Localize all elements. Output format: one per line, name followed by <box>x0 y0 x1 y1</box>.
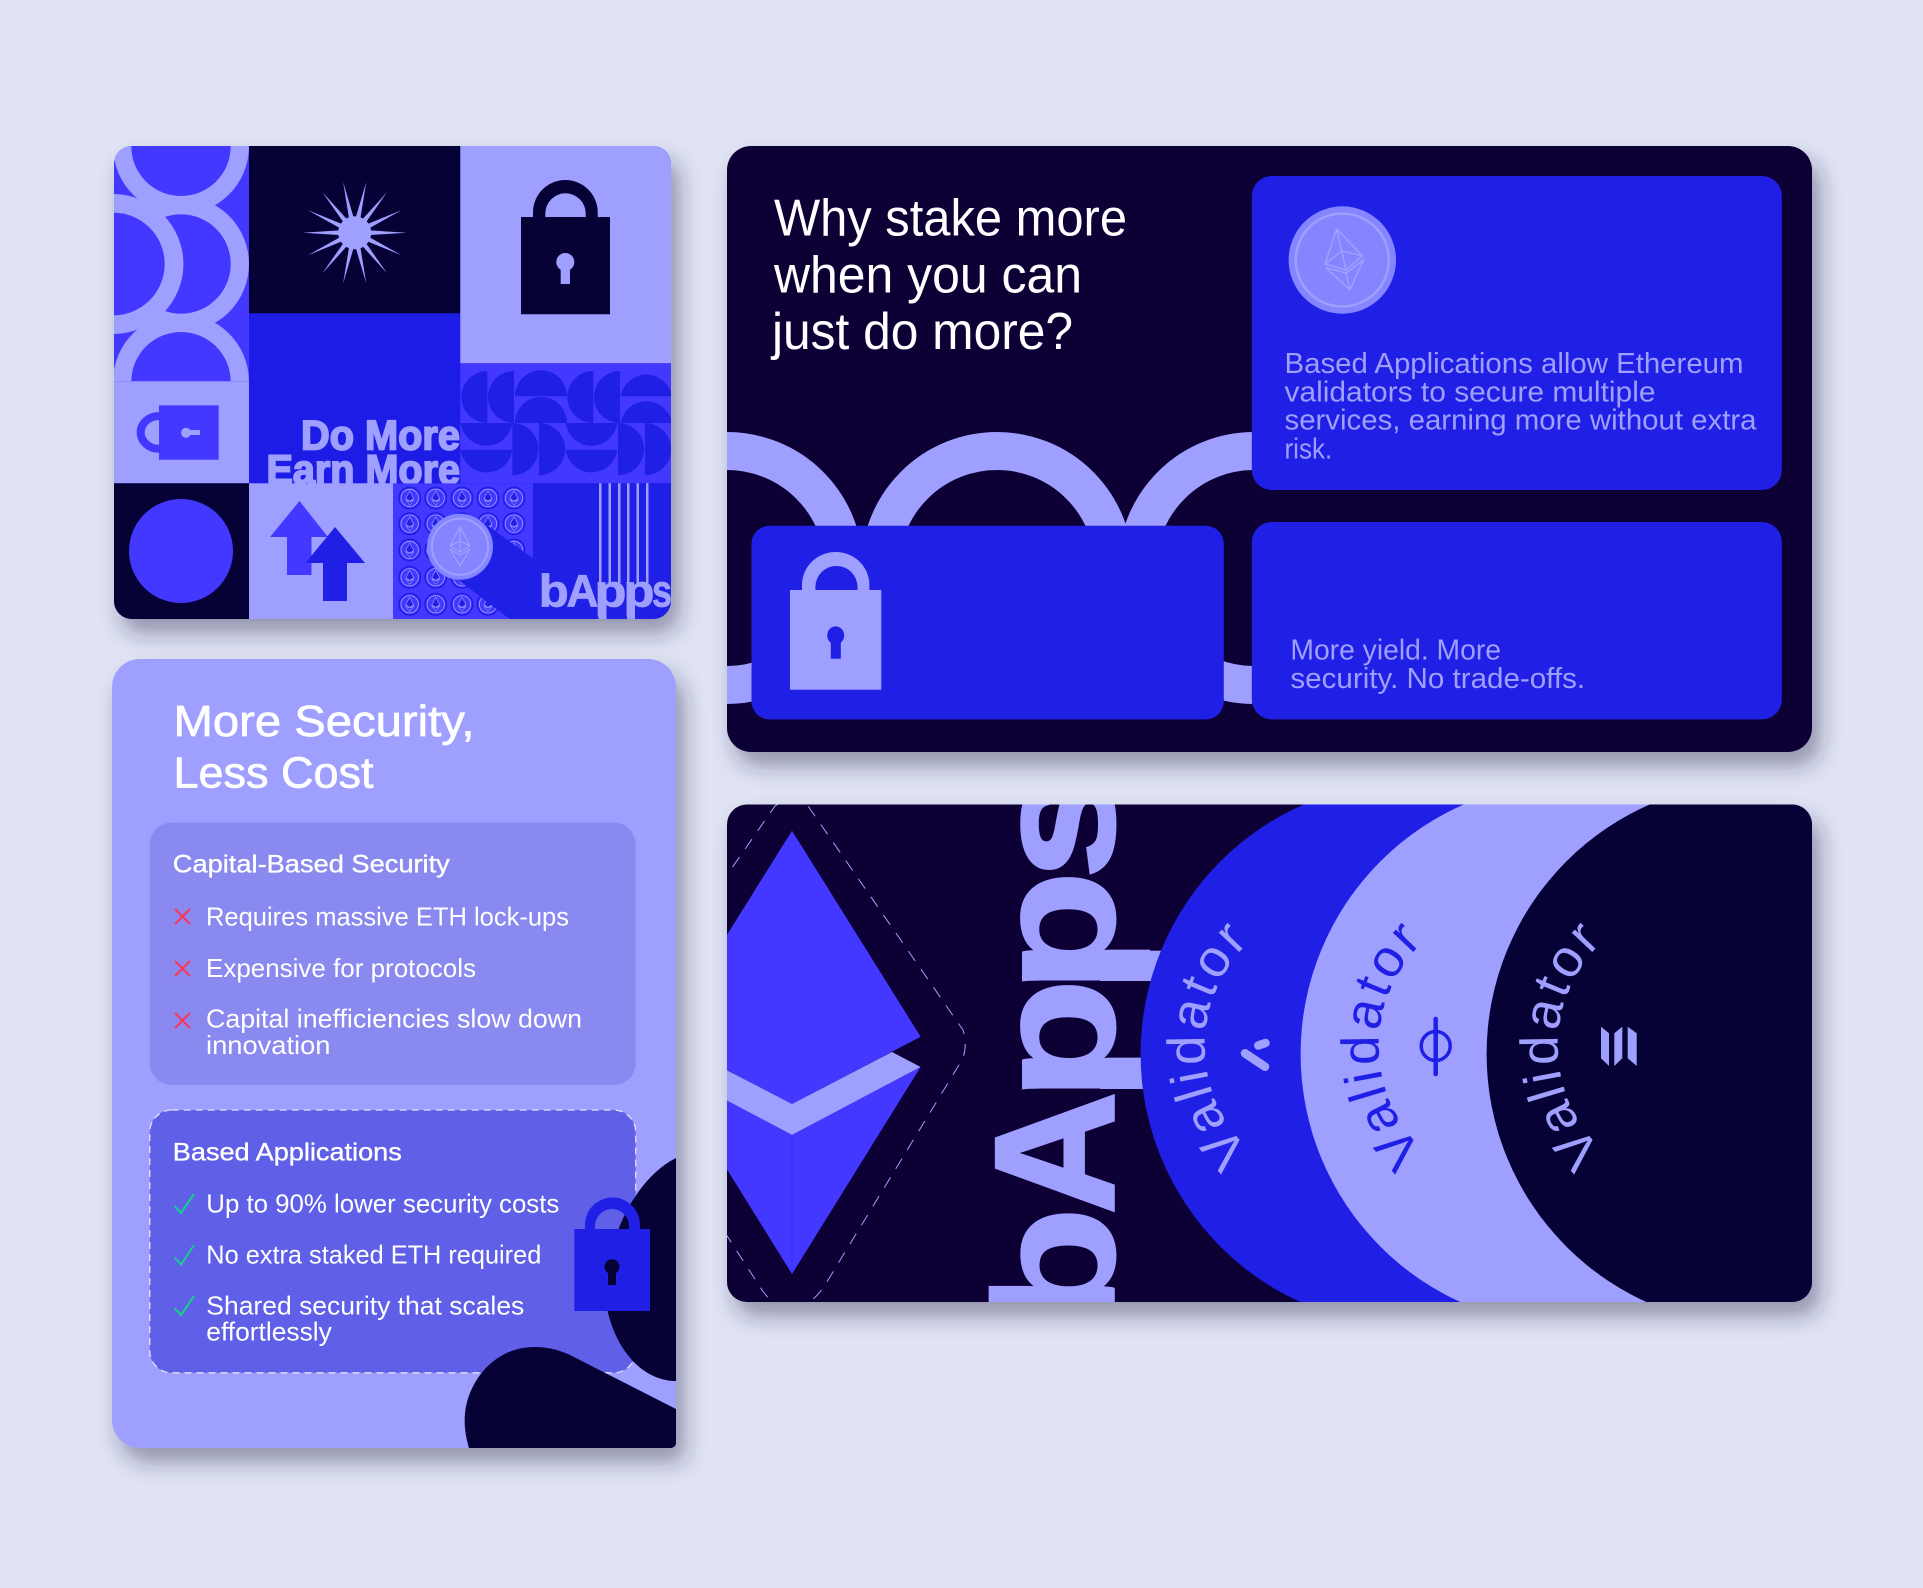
list with crosses: Capital inefficiencies slow down <box>206 1004 582 1034</box>
big rotated bApps: s <box>960 768 1150 880</box>
tile: circle <box>114 483 249 619</box>
list with checks <box>174 1188 559 1346</box>
heading: Why stake more when you can just do more?: Why stake more <box>774 190 1127 248</box>
description text: validators to secure multiple <box>1284 377 1656 409</box>
list with checks: Shared security that scales <box>206 1290 524 1320</box>
list with crosses: Expensive for protocols <box>206 953 476 983</box>
tagline: Do More Earn More: Earn More <box>266 446 460 493</box>
list with checks: effortlessly <box>206 1316 332 1346</box>
tile: interlocking rings <box>114 146 249 382</box>
list with checks: No extra staked ETH required <box>206 1240 541 1270</box>
card: Based Applications description <box>1252 176 1782 490</box>
panel: More Security, Less Cost <box>112 659 676 1448</box>
list with checks: Up to 90% lower security costs <box>206 1188 559 1218</box>
tile: dark padlock <box>460 146 671 363</box>
tile: semicircle pattern <box>460 363 672 483</box>
big rotated bApps: A <box>960 1092 1150 1214</box>
tile: bApps with lines: p <box>624 566 654 617</box>
decoration: dark blobs <box>465 1158 676 1448</box>
panel: bApps validators <box>721 804 1834 1330</box>
description text: Based Applications allow Ethereum <box>1284 348 1744 380</box>
heading: Why stake more when you can just do more? <box>770 190 1127 361</box>
box heading: Capital-Based Security <box>173 850 450 878</box>
big rotated bApps: p <box>960 871 1150 993</box>
tile: starburst <box>249 146 460 313</box>
tile: bApps with lines <box>533 483 672 620</box>
description text <box>1284 348 1757 466</box>
decoration: chain rings <box>727 432 1252 704</box>
big rotated bApps: p <box>960 979 1150 1101</box>
heading: More Security, Less Cost <box>174 697 474 798</box>
card: padlock <box>752 526 1224 719</box>
yield text: security. No trade-offs. <box>1290 663 1585 695</box>
heading: Why stake more when you can just do more?: when you can <box>773 247 1082 305</box>
yield text <box>1290 634 1585 695</box>
card: More yield <box>1252 522 1782 719</box>
yield text: More yield. More <box>1290 634 1501 666</box>
tile: bApps with lines: b <box>539 566 569 617</box>
tile: up arrows <box>249 483 393 619</box>
list with crosses: Requires massive ETH lock-ups <box>206 902 569 932</box>
heading: More Security, Less Cost: Less Cost <box>174 748 374 798</box>
big rotated bApps <box>988 804 1161 1302</box>
panel: mosaic card <box>108 146 693 647</box>
tile: sideways padlock <box>114 381 249 483</box>
panel: Why stake more <box>610 146 1812 752</box>
big rotated bApps: b <box>960 1207 1150 1329</box>
box heading: Based Applications <box>173 1138 402 1166</box>
tile: ethereum coins <box>393 483 533 619</box>
label: validator 3: Validator <box>1519 923 1596 1175</box>
tile: bApps with lines: p <box>594 566 626 617</box>
tagline: Do More Earn More <box>268 420 460 484</box>
tile: bApps with lines: s <box>652 566 672 617</box>
list with crosses <box>175 902 582 1060</box>
description text: services, earning more without extra <box>1284 405 1757 437</box>
tile: bApps with lines: A <box>566 566 598 617</box>
label: validator 1: Validator <box>1166 923 1242 1174</box>
label: validator 3 <box>1519 923 1637 1175</box>
box: Capital-Based Security <box>150 823 636 1085</box>
label: validator 2: Validator <box>1340 923 1416 1174</box>
icon: ethereum coin <box>1289 206 1396 314</box>
validator arcs <box>1140 804 1812 1302</box>
list with crosses: innovation <box>206 1030 330 1060</box>
box: Based Applications <box>150 1110 636 1373</box>
heading: More Security, Less Cost: More Security, <box>174 697 474 746</box>
icon: light padlock <box>790 552 881 690</box>
description text: risk. <box>1284 434 1332 466</box>
tagline: Do More Earn More: Do More <box>301 412 460 458</box>
graphic: ethereum diamond <box>727 804 966 1300</box>
heading: Why stake more when you can just do more?: just do more? <box>770 303 1073 361</box>
icon: blue padlock <box>574 1197 650 1311</box>
